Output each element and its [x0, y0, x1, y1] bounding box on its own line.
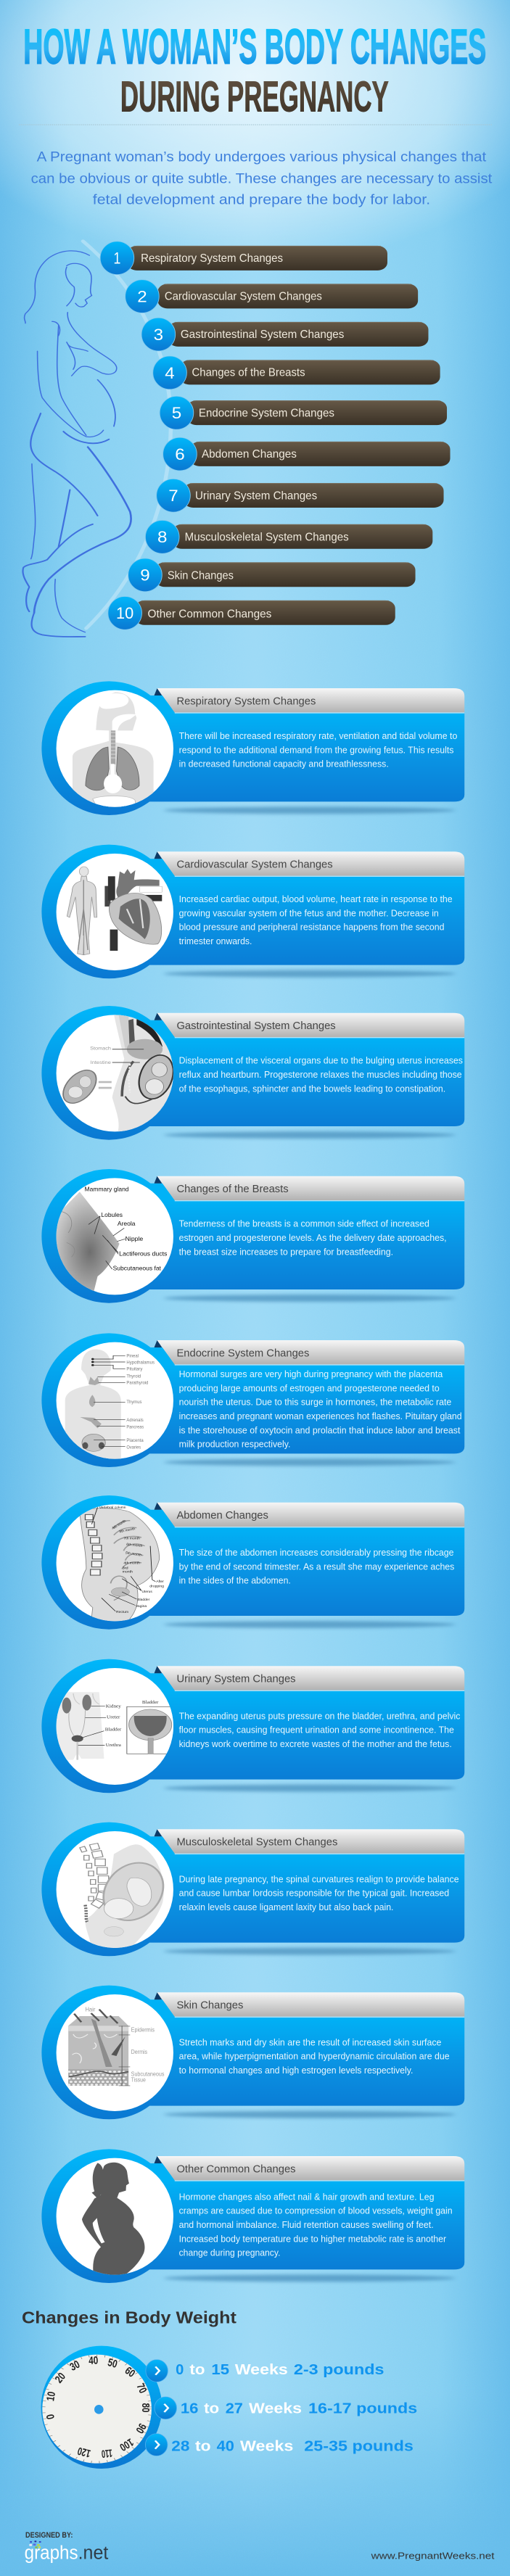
intro text: fetal development and prepare the body for labor.: [93, 191, 430, 207]
weight scale dial: 50: [107, 2356, 118, 2371]
list item 5: 5: [172, 405, 181, 422]
icon: breast anatomy diagram: Areola: [118, 1221, 136, 1228]
panel: cardiovascular system: [41, 845, 464, 978]
weight row 1: to: [189, 2361, 205, 2378]
icon: urinary tract diagram: Kidney: [106, 1703, 121, 1709]
designer credit: DESIGNED BY:: [25, 2530, 73, 2540]
list item 3: Gastrointestinal System Changes: [181, 328, 344, 341]
body text: relaxin levels cause ligament laxity but also back pain.: [179, 1902, 394, 1912]
body text: [179, 1711, 461, 1749]
weight row 2: 27: [226, 2400, 243, 2417]
weight scale dial: 70: [134, 2382, 149, 2395]
icon: endocrine glands diagram: [65, 1350, 155, 1460]
weight scale dial: 60: [123, 2364, 137, 2380]
icon: endocrine glands diagram: Ovaries: [126, 1444, 141, 1450]
icon: urinary tract diagram: Bladder: [142, 1699, 159, 1705]
icon: abdomen growth by month diagram: 8th month: [119, 1527, 136, 1534]
weight row 3: 40: [217, 2438, 234, 2454]
icon: breast anatomy diagram: Mammary gland: [85, 1186, 129, 1193]
body text: [179, 2037, 450, 2076]
body text: [179, 1056, 463, 1094]
weight row 3: 25-35 pounds: [304, 2438, 414, 2454]
list item 8: 8: [157, 529, 167, 546]
icon: breast anatomy diagram: [54, 1186, 168, 1292]
panel: endocrine system: [41, 1333, 464, 1467]
weight scale dial: 100: [118, 2435, 136, 2453]
icon: skin layers diagram: Dermis: [131, 2049, 147, 2055]
list item 7: 7: [168, 487, 178, 505]
icon: abdomen growth by month diagram: Rectum: [116, 1611, 128, 1614]
list item 3: [141, 318, 428, 351]
icon: endocrine glands diagram: Pineal: [126, 1353, 139, 1358]
icon: endocrine glands diagram: Thymus: [126, 1399, 142, 1405]
icon: urinary tract diagram: Ureter: [107, 1714, 120, 1720]
icon: abdomen growth by month diagram: 7th month: [123, 1537, 140, 1540]
icon: skin layers diagram: [68, 2007, 165, 2086]
icon: endocrine glands diagram: Pancreas: [126, 1424, 144, 1429]
weight scale dial: 40: [89, 2354, 99, 2367]
panel: musculoskeletal system: [41, 1822, 464, 1956]
body text: [179, 2192, 453, 2258]
body text: [179, 894, 453, 946]
icon: abdomen growth by month diagram: month: [123, 1570, 133, 1574]
list item 4: 4: [165, 364, 175, 382]
heading: Changes in Body Weight: [22, 2308, 237, 2327]
list item 9: 9: [140, 566, 150, 585]
arrow bullet 2: [155, 2397, 176, 2419]
weight scale dial: 20: [53, 2371, 68, 2385]
list item 8: [145, 520, 432, 553]
list item 2: 2: [137, 288, 147, 306]
list item 5: [160, 396, 447, 429]
list item 10: Other Common Changes: [148, 607, 271, 620]
list item 10: 10: [116, 605, 133, 622]
panel: breasts: [41, 1169, 464, 1303]
body text: [179, 1548, 454, 1586]
body text: [179, 731, 457, 769]
icon: endocrine glands diagram: Parathyroid: [126, 1379, 148, 1385]
list item 6: [163, 437, 451, 471]
body text: [179, 1219, 447, 1258]
icon: urinary tract diagram: [54, 1692, 177, 1760]
panel: urinary system: [41, 1659, 464, 1793]
list item 6: Abdomen Changes: [202, 447, 297, 461]
list item 8: Musculoskeletal System Changes: [185, 531, 349, 543]
decorative arc and pregnant woman outline: [22, 241, 170, 637]
list item 2: Cardiovascular System Changes: [165, 289, 322, 302]
body text: trimester onwards.: [179, 936, 252, 946]
body text: milk production respectively.: [179, 1440, 290, 1450]
panel: other common changes: [41, 2149, 464, 2283]
panel: skin: [41, 1986, 464, 2119]
icon: abdomen growth by month diagram: Vertebral column: [99, 1506, 126, 1510]
list item 4: [153, 356, 440, 389]
icon: abdomen growth by month diagram: Uterus: [141, 1590, 152, 1594]
weight row 2: 16: [181, 2400, 198, 2417]
icon: endocrine glands diagram: Thyroid: [126, 1374, 141, 1379]
list item 4: Changes of the Breasts: [192, 366, 305, 379]
body text: in decreased functional capacity and breathlessness.: [179, 759, 389, 769]
heading: Urinary System Changes: [176, 1672, 296, 1685]
icon: endocrine glands diagram: Placenta: [126, 1437, 144, 1443]
weight row 2: [181, 2400, 417, 2417]
icon: breast anatomy diagram: Lactiferous ducts: [119, 1251, 168, 1258]
icon: endocrine glands diagram: Pituitary: [126, 1366, 142, 1371]
icon: breast anatomy diagram: Nipple: [126, 1236, 143, 1243]
panel: respiratory system: [41, 681, 464, 815]
heading: Skin Changes: [176, 1999, 244, 2011]
panel: changes in body weight: [22, 2308, 495, 2563]
list item 9: [128, 558, 416, 592]
icon: endocrine glands diagram: Adrenals: [126, 1417, 144, 1423]
weight scale dial: 30: [68, 2358, 82, 2374]
heading: Musculoskeletal System Changes: [176, 1836, 338, 1848]
body text: in the sides of the abdomen.: [179, 1576, 291, 1586]
icon: breast anatomy diagram: Lobules: [101, 1212, 123, 1219]
icon: skin layers diagram: Hair: [85, 2007, 95, 2013]
arrow bullet 3: [145, 2434, 168, 2456]
list item 7: [157, 479, 444, 512]
list item 10: [108, 596, 395, 629]
icon: abdomen growth by month diagram: [80, 1506, 164, 1622]
icon: abdomen growth by month diagram: 3rd: [123, 1566, 128, 1570]
icon: abdomen growth by month diagram: Bladder: [137, 1598, 149, 1602]
weight row 2: to: [204, 2400, 219, 2417]
icon: skin layers diagram: Subcutaneous: [131, 2071, 165, 2078]
icon: digestive organs and uterus diagram: [57, 1014, 178, 1133]
weight row 1: 15: [211, 2361, 229, 2378]
weight row 1: 0: [176, 2361, 184, 2378]
icon: abdomen growth by month diagram: dropping: [149, 1585, 164, 1588]
icon: skin layers diagram: Epidermis: [131, 2027, 155, 2034]
heading: Cardiovascular System Changes: [176, 858, 333, 870]
body text: the breast size increases to prepare for breastfeeding.: [179, 1247, 393, 1258]
body text: [179, 1874, 459, 1912]
icon: abdomen growth by month diagram: 5th month: [125, 1551, 141, 1557]
weight row 2: 16-17 pounds: [308, 2400, 417, 2417]
weight row 3: to: [195, 2438, 211, 2454]
weight scale dial: 10: [44, 2390, 58, 2402]
weight row 2: Weeks: [249, 2400, 302, 2417]
body text: change during pregnancy.: [179, 2248, 280, 2258]
body text: [179, 1369, 462, 1450]
weight scale dial: 120: [76, 2444, 92, 2460]
heading: Respiratory System Changes: [176, 695, 316, 707]
title: [19, 20, 492, 125]
icon: abdomen growth by month diagram: After: [156, 1580, 164, 1584]
arrow bullet 1: [146, 2360, 168, 2382]
icon: abdomen growth by month diagram: 9th month: [112, 1519, 128, 1530]
designer credit: [25, 2530, 109, 2563]
icon: pregnant woman silhouette: [82, 2163, 144, 2276]
icon: spine and fetus diagram: [80, 1844, 173, 1949]
icon: abdomen growth by month diagram: Vagina: [136, 1605, 147, 1609]
icon: lungs diagram: [73, 692, 154, 809]
heading: Changes of the Breasts: [176, 1183, 289, 1194]
designer credit: .net: [78, 2542, 109, 2563]
numbered topic list: [100, 242, 451, 629]
body text: to hormonal changes and high estrogen levels respectively.: [179, 2065, 413, 2076]
heading: Other Common Changes: [176, 2163, 296, 2175]
weight row 3: 28: [171, 2438, 189, 2454]
list item 1: [100, 242, 387, 275]
icon: urinary tract diagram: Bladder: [105, 1727, 122, 1732]
list item 7: Urinary System Changes: [195, 489, 317, 502]
weight row 1: 2-3 pounds: [294, 2361, 384, 2378]
list item 3: 3: [154, 326, 163, 344]
panel: gastrointestinal system: [41, 1006, 464, 1140]
weight scale dial: 0: [44, 2413, 57, 2420]
list item 6: 6: [175, 446, 185, 463]
designer credit: graphs: [25, 2542, 78, 2563]
weight row 1: [176, 2361, 384, 2378]
icon: urinary tract diagram: Urethra: [106, 1742, 121, 1748]
icon: digestive organs and uterus diagram: Intestine: [91, 1060, 111, 1065]
weight scale dial: 80: [139, 2403, 152, 2412]
icon: digestive organs and uterus diagram: Stomach: [90, 1046, 111, 1051]
weight scale dial: 110: [101, 2447, 113, 2460]
icon: endocrine glands diagram: Hypothalamus: [126, 1360, 155, 1365]
weight scale dial: [41, 2346, 162, 2469]
heading: Abdomen Changes: [176, 1509, 268, 1521]
heading: Gastrointestinal System Changes: [176, 1020, 336, 1031]
intro text: [31, 149, 493, 207]
icon: abdomen growth by month diagram: 4th month: [123, 1561, 140, 1565]
icon: skin layers diagram: Tissue: [131, 2077, 146, 2084]
icon: breast anatomy diagram: Subcutaneous fat: [113, 1266, 161, 1272]
list item 9: Skin Changes: [168, 569, 234, 582]
panel: abdomen: [41, 1495, 464, 1630]
weight row 3: Weeks: [240, 2438, 293, 2454]
weight row 1: Weeks: [235, 2361, 288, 2378]
list item 1: 1: [113, 249, 120, 268]
heading: Endocrine System Changes: [176, 1347, 310, 1359]
icon: body and heart diagram: [67, 867, 162, 955]
list item 2: [126, 280, 418, 313]
list item 1: Respiratory System Changes: [141, 252, 283, 265]
icon: abdomen growth by month diagram: 6th month: [126, 1543, 143, 1548]
list item 5: Endocrine System Changes: [199, 407, 334, 419]
weight scale dial: 90: [133, 2421, 149, 2435]
weight row 3: [171, 2438, 414, 2454]
